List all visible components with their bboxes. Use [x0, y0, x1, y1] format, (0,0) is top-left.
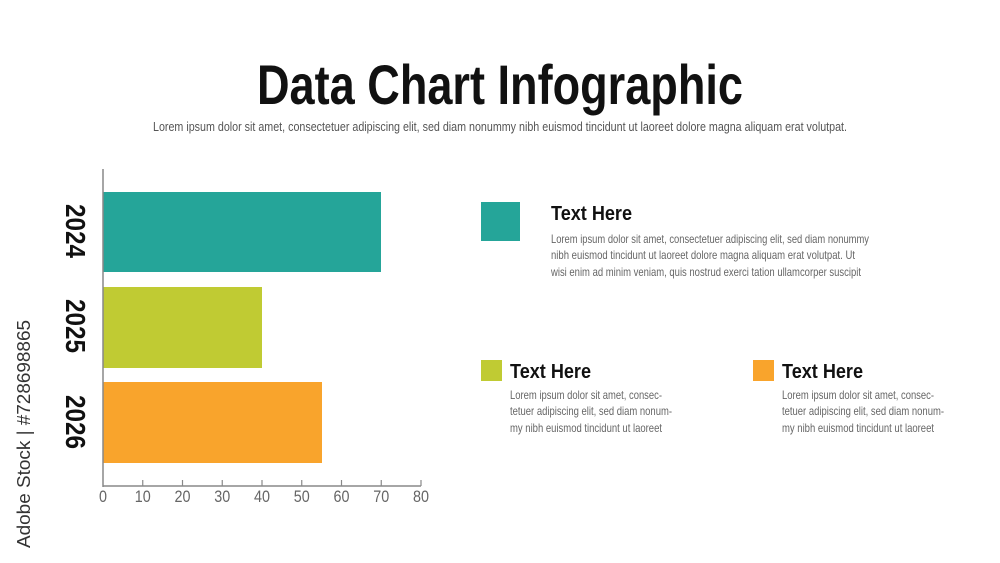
axis labels: 70	[373, 487, 389, 506]
year labels: 2024	[60, 204, 91, 258]
legend item 2	[481, 360, 672, 435]
bar: 2026	[103, 382, 322, 463]
axis labels: 80	[413, 487, 429, 506]
legend item 1: Text Here	[551, 203, 632, 225]
axis labels	[99, 487, 429, 506]
axis labels: 10	[135, 487, 151, 506]
axis labels: 40	[254, 487, 270, 506]
icon: orange square	[753, 360, 774, 381]
year labels: 2025	[60, 299, 91, 353]
bar: 2024	[103, 192, 381, 272]
icon: teal square	[481, 202, 520, 241]
legend item 3: tetuer adipiscing elit, sed diam nonum-	[782, 404, 944, 418]
year labels: 2026	[60, 395, 91, 449]
legend item 1: nibh euismod tincidunt ut laoreet dolore magna aliquam erat volutpat. Ut	[551, 248, 856, 262]
axis labels: 0	[99, 487, 107, 506]
bar: 2025	[103, 287, 262, 368]
axis labels: 30	[214, 487, 230, 506]
legend item 1	[481, 202, 869, 279]
legend item 2: Text Here	[510, 361, 591, 383]
legend item 1: wisi enim ad minim veniam, quis nostrud exerci tation ullamcorper suscipit	[550, 265, 862, 279]
legend item 3: my nibh euismod tincidunt ut laoreet	[782, 421, 935, 435]
legend item 3: Lorem ipsum dolor sit amet, consec-	[782, 388, 934, 402]
subtitle: Lorem ipsum dolor sit amet, consectetuer adipiscing elit, sed diam nonummy nibh euismod tincidunt ut laoreet dolore magna aliquam erat volutpat.	[153, 119, 847, 134]
bar chart	[60, 169, 429, 506]
axis labels: 20	[174, 487, 190, 506]
legend item 3: Text Here	[782, 361, 863, 383]
axis labels: 60	[334, 487, 350, 506]
legend item 1: Lorem ipsum dolor sit amet, consectetuer adipiscing elit, sed diam nonummy	[551, 232, 869, 246]
legend item 2: my nibh euismod tincidunt ut laoreet	[510, 421, 663, 435]
icon: lime square	[481, 360, 502, 381]
watermark: Adobe Stock id: Adobe Stock | #728698865	[14, 320, 34, 548]
legend item 2: Lorem ipsum dolor sit amet, consec-	[510, 388, 662, 402]
year labels	[60, 204, 91, 449]
legend item 2: tetuer adipiscing elit, sed diam nonum-	[510, 404, 672, 418]
legend item 3	[753, 360, 944, 435]
axis labels: 50	[294, 487, 310, 506]
title: Data Chart Infographic	[257, 53, 743, 116]
